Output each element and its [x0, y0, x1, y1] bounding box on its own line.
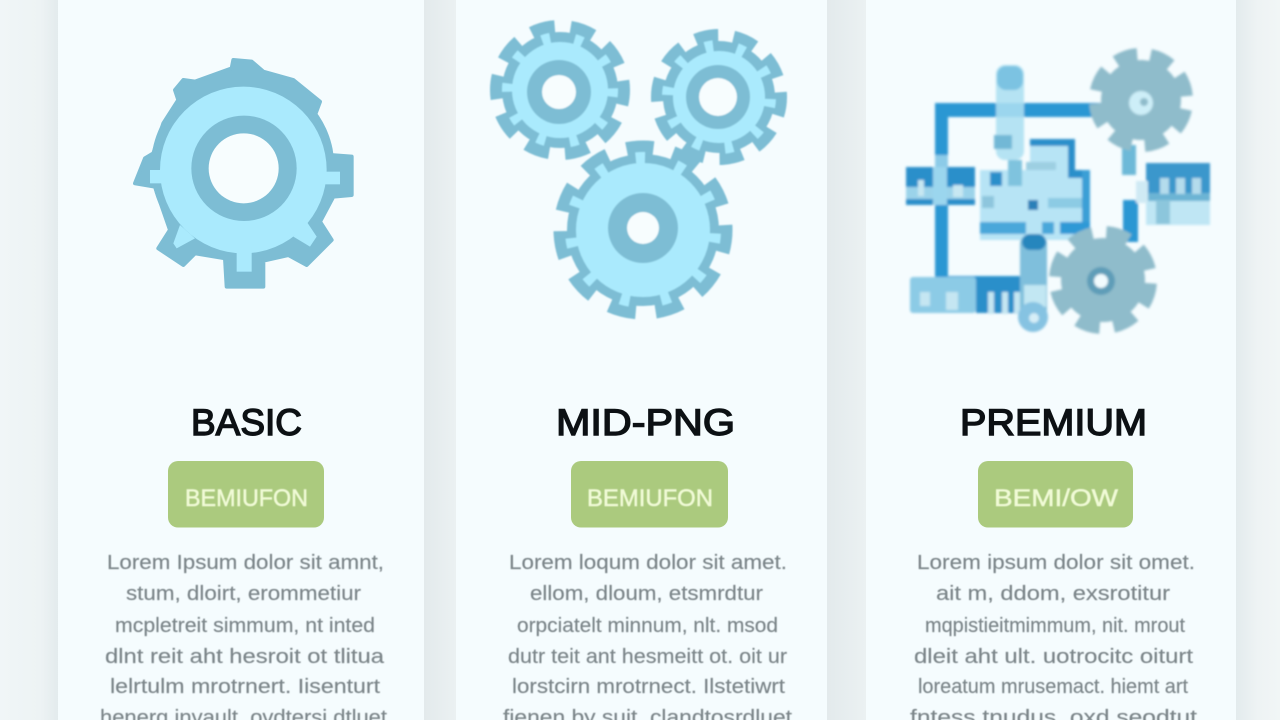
button: premium: BEMI/OW	[994, 485, 1118, 512]
icon: three gears	[489, 19, 784, 315]
text block: premium description	[910, 552, 1198, 720]
icon: single gear	[135, 60, 352, 287]
block: left	[906, 167, 975, 205]
column: top piston	[994, 65, 1024, 160]
gear: top left	[489, 19, 631, 161]
block: right	[1136, 163, 1210, 225]
text block: mid-png description	[503, 552, 792, 720]
gear: bottom	[558, 145, 728, 315]
block: bottom	[910, 277, 1020, 314]
text block: basic description: dlnt reit aht hesroit ot tlitua	[105, 646, 385, 668]
text block: mid-png description: dutr teit ant hesmeitt ot. oit ur	[508, 646, 787, 668]
text block: premium description: mqpistieitmimmum, nit. mrout	[925, 615, 1185, 637]
button: premium	[978, 461, 1133, 528]
text block: premium description: loreatum mrusemact. hiemt art	[918, 676, 1188, 698]
frame: circuit lines	[935, 103, 1138, 291]
button: basic	[168, 461, 324, 528]
text block: mid-png description: Lorem loqum dolor sit amet.	[509, 552, 787, 574]
text block: premium description: dleit aht ult. uotrocitc oiturt	[914, 646, 1194, 668]
text block: mid-png description: lorstcirn mrotrnect. Ilstetiwrt	[512, 676, 785, 698]
text block: basic description: stum, dloirt, erommetiur	[126, 583, 361, 605]
text block: basic description: lelrtulm mrotrnert. Iisenturt	[110, 676, 381, 698]
panel: mid-png	[456, 0, 827, 720]
button: basic: BEMIUFON	[185, 485, 308, 512]
heading: mid-png: MID-PNG	[556, 402, 735, 443]
heading: basic: BASIC	[191, 402, 302, 443]
gear: bottom right	[1054, 231, 1152, 329]
icon: circuit with gears	[906, 48, 1210, 332]
block: centre chip	[980, 139, 1090, 240]
text block: mid-png description: orpciatelt minnum, nlt. msod	[517, 615, 778, 637]
piston: bottom	[1018, 234, 1048, 332]
text block: basic description: mcpletreit simmum, nt inted	[115, 615, 375, 637]
gear: top right	[1089, 48, 1193, 152]
text block: mid-png description: ellom, dloum, etsmrdtur	[530, 583, 763, 605]
button: mid-png: BEMIUFON	[587, 485, 713, 512]
text block: premium description: ait m, ddom, exsrotitur	[936, 583, 1170, 605]
heading: premium: PREMIUM	[960, 402, 1147, 443]
gear: top right	[654, 32, 784, 162]
button: mid-png	[571, 461, 728, 528]
text block: premium description: Lorem ipsum dolor sit omet.	[917, 552, 1195, 574]
text block: basic description: Lorem Ipsum dolor sit amnt,	[107, 552, 384, 574]
panel: premium	[866, 0, 1236, 720]
panel: basic	[58, 0, 424, 720]
text block: basic description	[100, 552, 387, 720]
